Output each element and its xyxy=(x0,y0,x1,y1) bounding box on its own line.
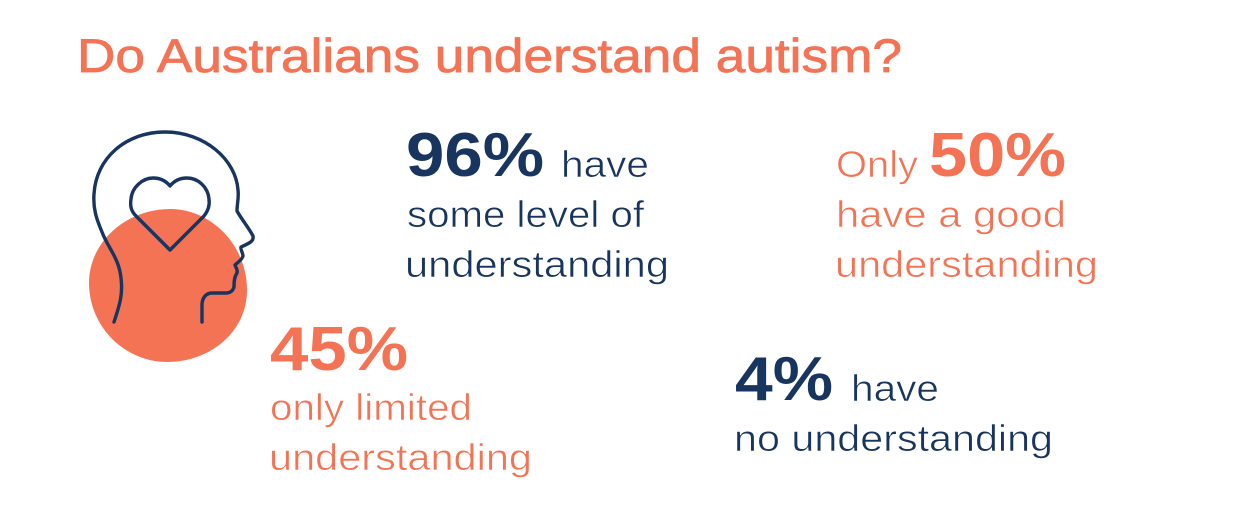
stat: 96% some level of understanding: 96% xyxy=(406,121,544,190)
stat: 45% only limited understanding: only limited xyxy=(270,387,472,428)
stat: only 50% have a good understanding: 50% xyxy=(929,121,1066,190)
stat: 4% have no understanding: 4% xyxy=(735,345,833,414)
icon: orange circle xyxy=(89,209,247,362)
stat: 96% some level of understanding: understanding xyxy=(405,244,669,285)
stat: 4% have no understanding: no understanding xyxy=(734,418,1053,459)
stat: 45% only limited understanding: understanding xyxy=(269,437,532,478)
stat: only 50% have a good understanding: understanding xyxy=(835,244,1098,285)
stat: 45% only limited understanding: 45% xyxy=(270,315,408,384)
icon: head with heart xyxy=(89,132,253,362)
stat: only 50% have a good understanding xyxy=(835,121,1098,285)
icon: heart xyxy=(131,178,209,250)
icon: head outline xyxy=(94,132,253,322)
stat: 4% have no understanding xyxy=(734,345,1053,459)
title: Do Australians understand autism? xyxy=(77,29,902,82)
stat: 45% only limited understanding xyxy=(269,315,532,478)
stat: 96% some level of understanding: some level of xyxy=(407,194,645,235)
stat: 96% some level of understanding xyxy=(405,121,669,285)
stat: 4% have no understanding: have xyxy=(851,368,939,409)
stat: only 50% have a good understanding: Only xyxy=(836,144,919,185)
stat: 96% some level of understanding: have xyxy=(561,144,649,185)
stat: only 50% have a good understanding: have a good xyxy=(836,194,1066,235)
